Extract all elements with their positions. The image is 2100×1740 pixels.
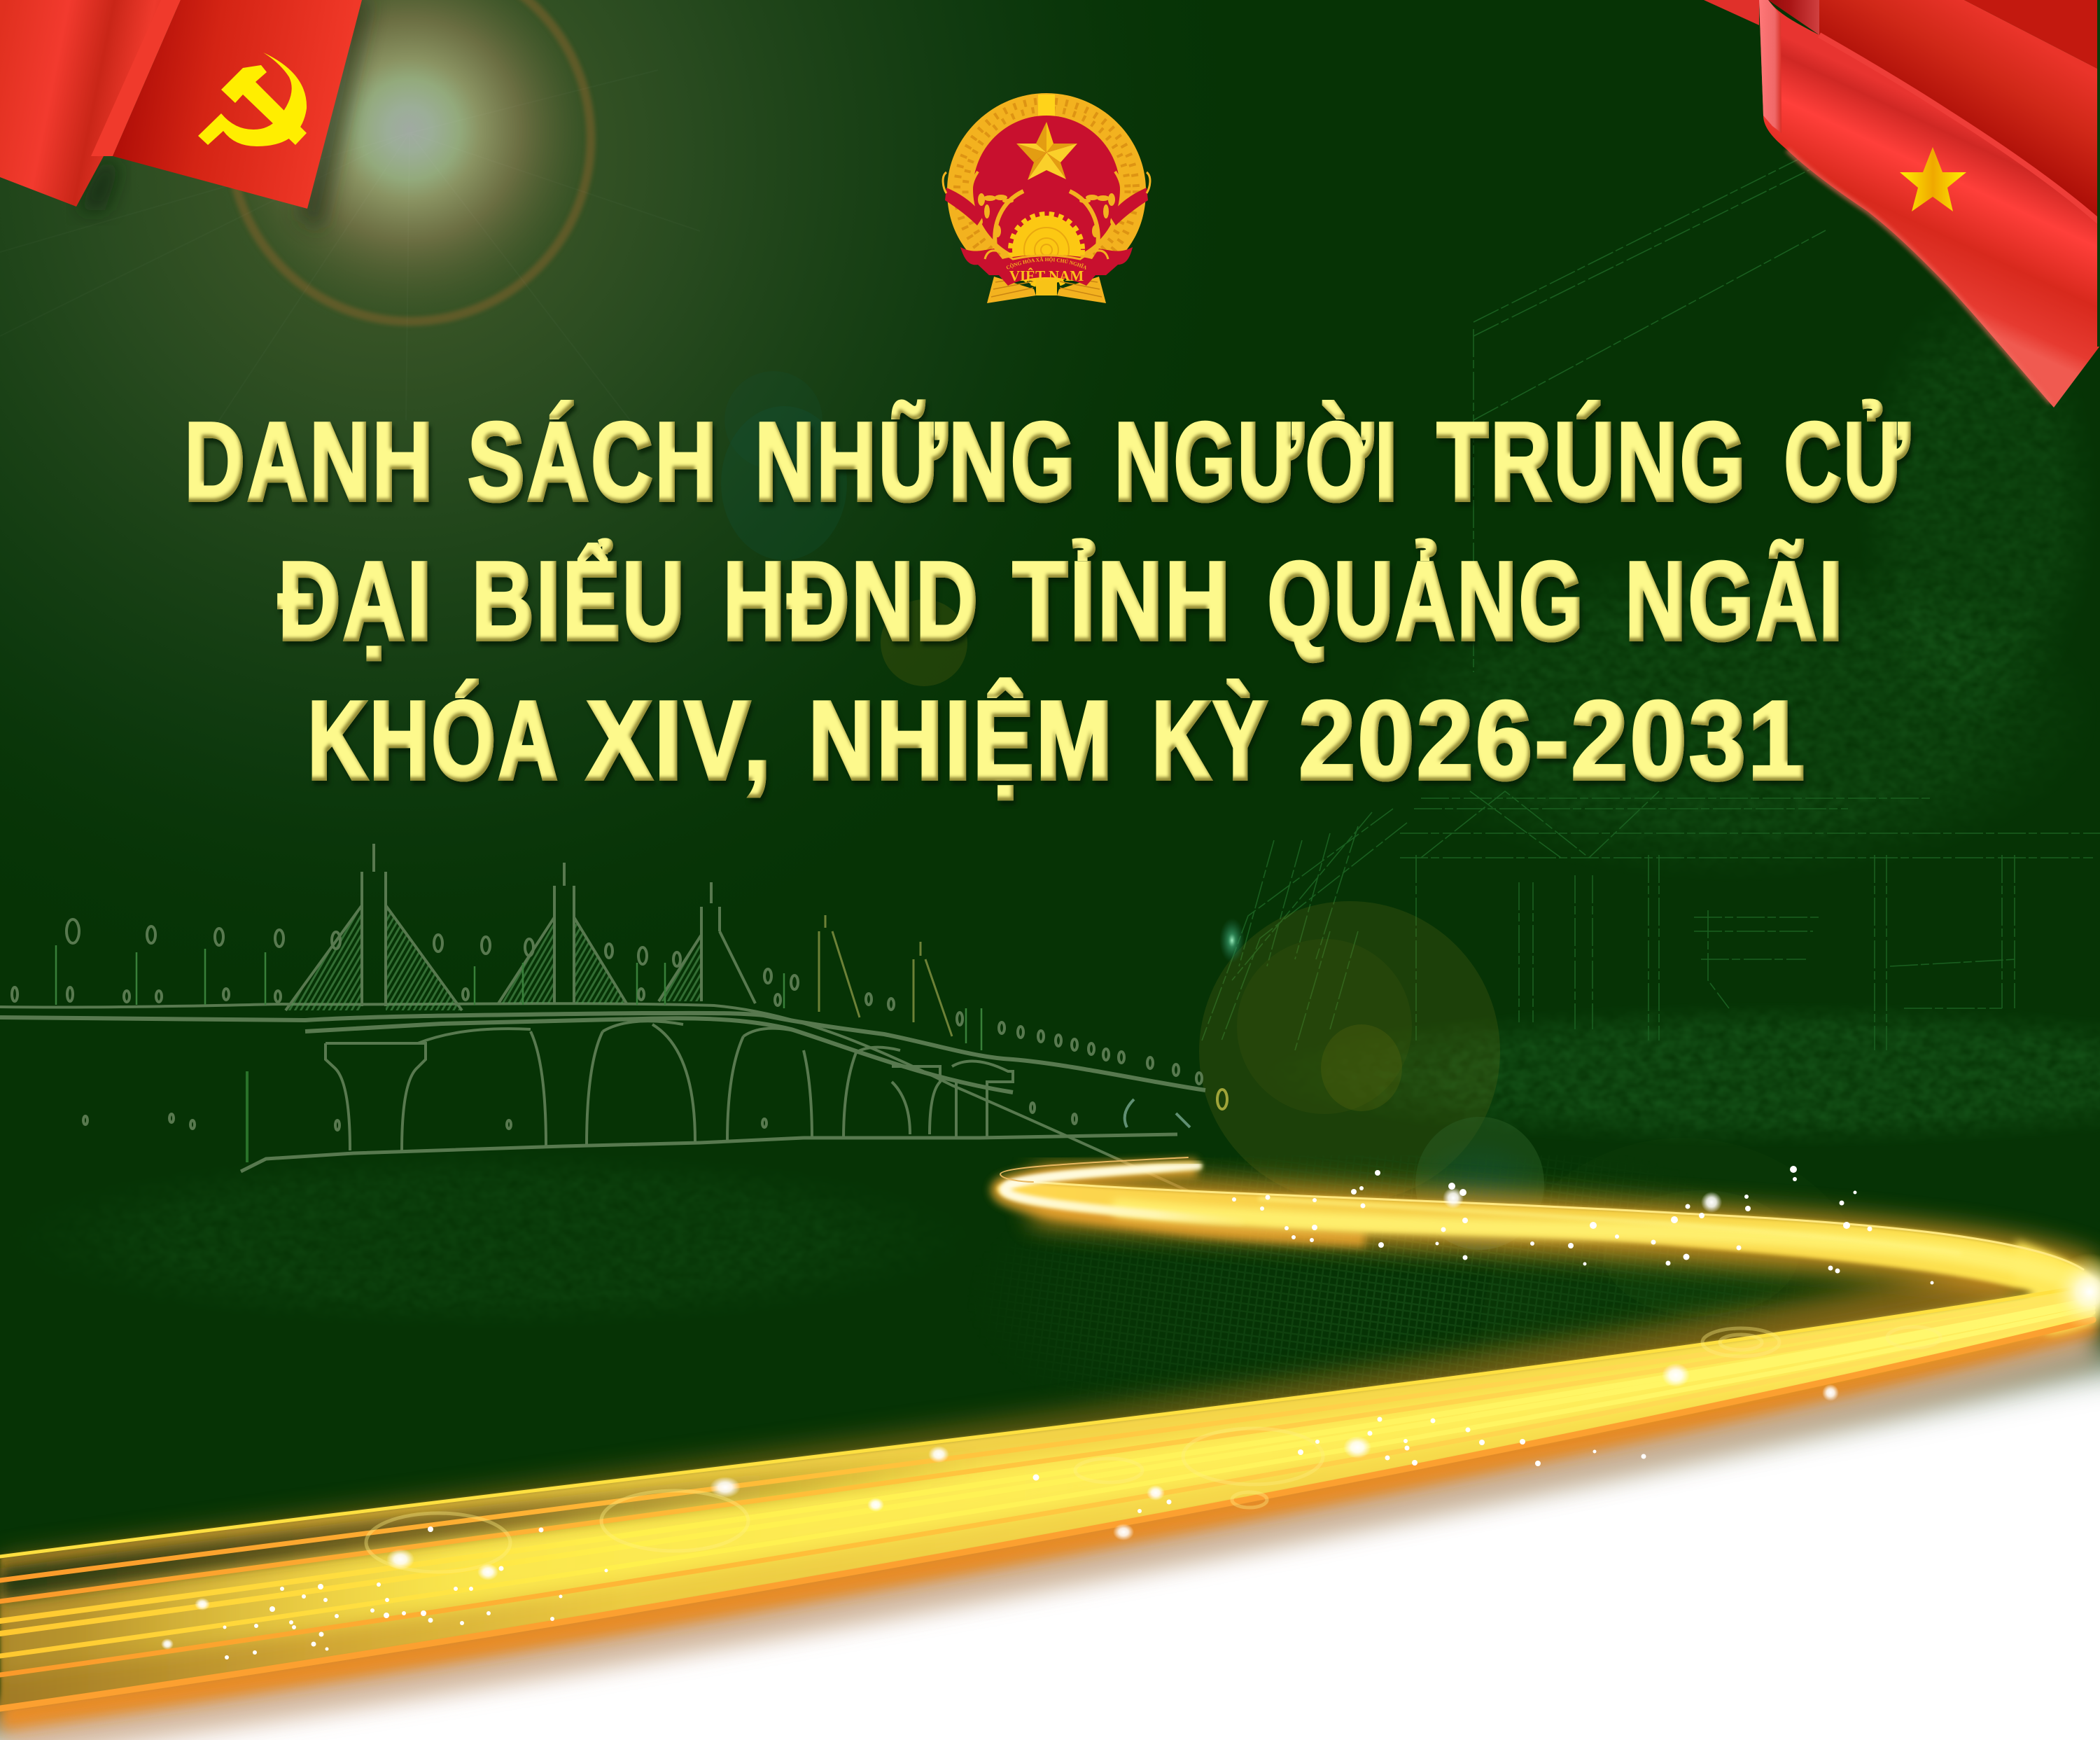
emblem gold wreath xyxy=(947,93,1146,280)
ribbon top shade xyxy=(0,1449,980,1600)
title line 2: BIỂU xyxy=(472,540,687,663)
title line 1: TRÚNG xyxy=(1437,401,1748,524)
bokeh circles xyxy=(721,371,1886,1544)
title line 3 xyxy=(308,679,1807,802)
flag back pieces xyxy=(1704,0,2100,231)
lower ribbon band xyxy=(0,1285,2093,1708)
ribbon outer glow xyxy=(0,1168,2096,1735)
title line 2: HĐND xyxy=(724,540,980,663)
large sparkles xyxy=(161,1188,1839,1650)
emblem wheat sheaf base xyxy=(987,277,1106,303)
title line 2: TỈNH xyxy=(1013,540,1233,663)
title xyxy=(185,401,1912,802)
bridge piers and arches xyxy=(241,1021,1190,1171)
ribbon tip flare xyxy=(2051,1253,2100,1330)
title line 1: NGƯỜI xyxy=(1114,401,1400,524)
flag upper edge highlight xyxy=(1819,35,2100,223)
flag lower edge highlight xyxy=(1787,150,2051,403)
title line 2: QUẢNG xyxy=(1268,540,1586,663)
emblem gear xyxy=(1012,216,1081,284)
white lower corner xyxy=(0,1362,2100,1740)
lower grid texture xyxy=(1078,1244,1660,1384)
upper ribbon band xyxy=(997,1181,2097,1295)
ribbon rings xyxy=(366,1327,1940,1572)
flag right edge strip xyxy=(2097,0,2100,347)
title line 3: NHIỆM xyxy=(809,679,1114,802)
ribbon right turn xyxy=(2009,1241,2099,1334)
emblem red disc xyxy=(973,116,1120,263)
title line 1: DANH xyxy=(185,401,435,524)
emblem motto small: CỘNG HÒA XÃ HỘI CHỦ NGHĨA xyxy=(1007,256,1086,270)
ribbon strands xyxy=(0,1157,2093,1708)
bridge line art xyxy=(0,844,1227,1204)
title line 2: ĐẠI xyxy=(279,540,434,663)
flag left highlight xyxy=(1759,0,1782,133)
ground speckle left xyxy=(0,1148,980,1330)
lamp posts and lamps xyxy=(12,919,1227,1130)
title line 2 xyxy=(279,540,1845,663)
flag shadow xyxy=(298,0,371,231)
small sparkles xyxy=(223,1166,1933,1659)
title line 3: KỲ xyxy=(1152,679,1270,802)
vietnam flag xyxy=(1704,0,2100,408)
emblem banner outline xyxy=(985,251,1108,259)
bridge towers and cables xyxy=(286,844,952,1036)
title line 3: KHÓA xyxy=(308,679,560,802)
sparkle particles xyxy=(161,1166,1933,1659)
title line 1: NHỮNG xyxy=(755,401,1077,524)
flag left fold xyxy=(0,0,181,207)
bridge deck xyxy=(0,1003,1218,1204)
party flag xyxy=(0,0,371,231)
title line 1: SÁCH xyxy=(468,401,720,524)
national emblem xyxy=(942,93,1151,303)
emblem rice sprigs and side ribbons xyxy=(943,172,1150,246)
flag front panel xyxy=(113,0,362,209)
title line 2: NGÃI xyxy=(1625,540,1845,663)
icon: hammer and sickle xyxy=(198,53,307,146)
icon: yellow star xyxy=(1900,147,1966,211)
lens flare top left xyxy=(0,0,700,434)
emblem motto large: VIỆT NAM xyxy=(1009,267,1084,284)
title line 3: 2026-2031 xyxy=(1299,679,1807,802)
emblem star xyxy=(1016,122,1077,180)
building line art xyxy=(1050,158,2100,1148)
emblem banner xyxy=(960,247,1133,286)
title line 1 xyxy=(185,401,1912,524)
golden light ribbon xyxy=(0,1157,2100,1735)
flag front ribbon xyxy=(1759,0,2100,408)
title line 3: XIV, xyxy=(587,679,774,802)
title line 1: CỬ xyxy=(1784,401,1912,524)
